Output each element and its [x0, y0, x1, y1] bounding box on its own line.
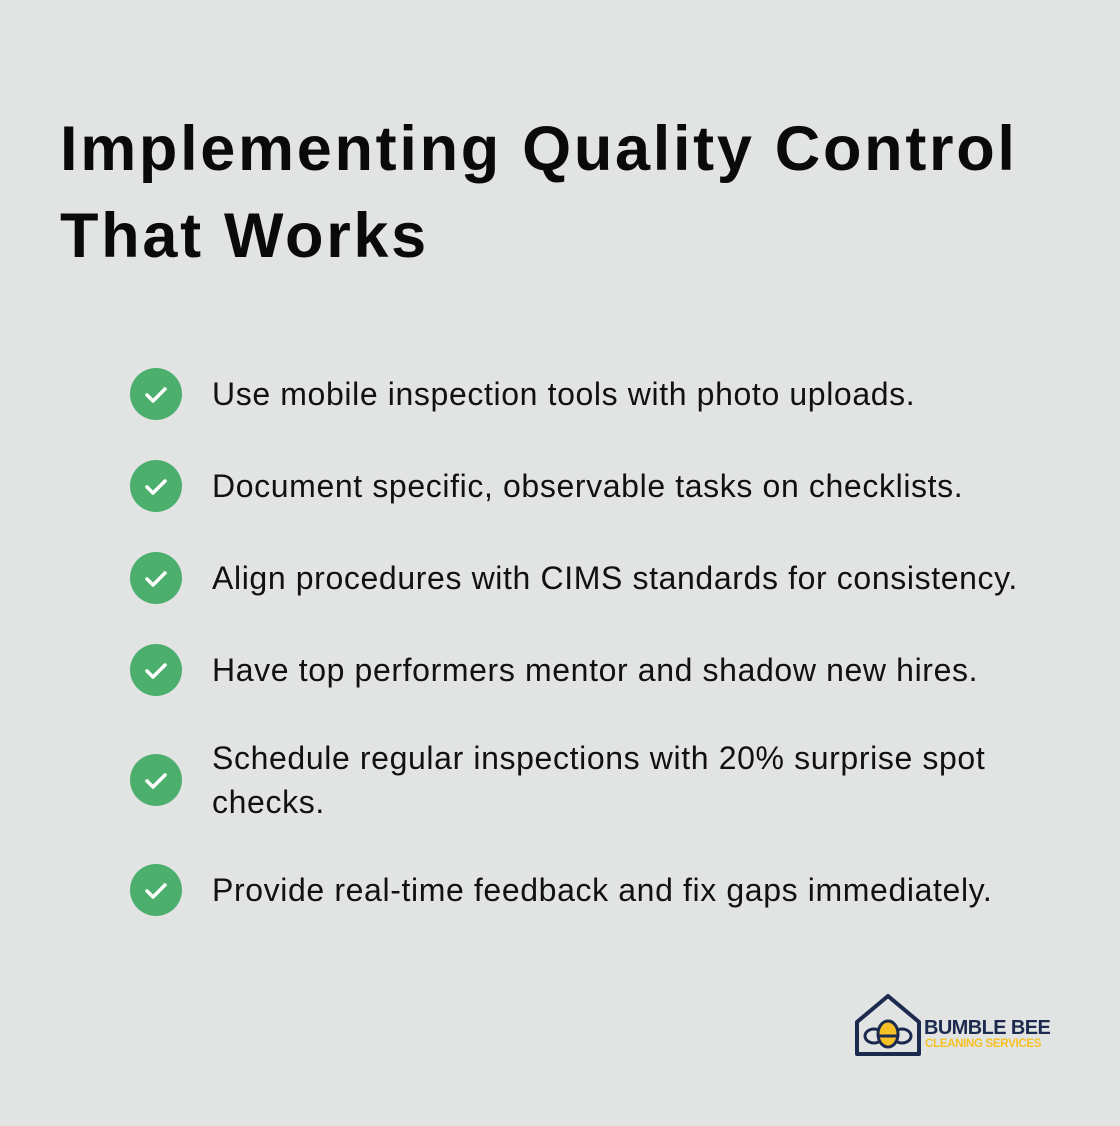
logo: CLEANING SERVICES: [925, 1038, 1041, 1050]
logo text: BUMBLE BEE: [924, 1017, 1050, 1039]
title: Implementing Quality Control: [60, 114, 1018, 184]
item 6: Provide real-time feedback and fix gaps immediately.: [212, 872, 992, 908]
item 4: Have top performers mentor and shadow new hires.: [212, 652, 978, 688]
item 2: [130, 460, 963, 512]
item 4: [130, 644, 978, 696]
item 1: Use mobile inspection tools with photo uploads.: [212, 376, 915, 412]
item 5: checks.: [212, 784, 325, 820]
item 3: Align procedures with CIMS standards for consistency.: [212, 560, 1018, 596]
item 3: [130, 552, 1018, 604]
item 6: [130, 864, 992, 916]
title: That Works: [60, 201, 429, 271]
title: [60, 114, 1018, 271]
item 2: Document specific, observable tasks on checklists.: [212, 468, 963, 504]
item 5: [130, 740, 985, 820]
logo: [855, 994, 1050, 1056]
item 1: [130, 368, 915, 420]
item 5: Schedule regular inspections with 20% surprise spot: [212, 740, 985, 776]
icon: bee house: [855, 994, 921, 1056]
